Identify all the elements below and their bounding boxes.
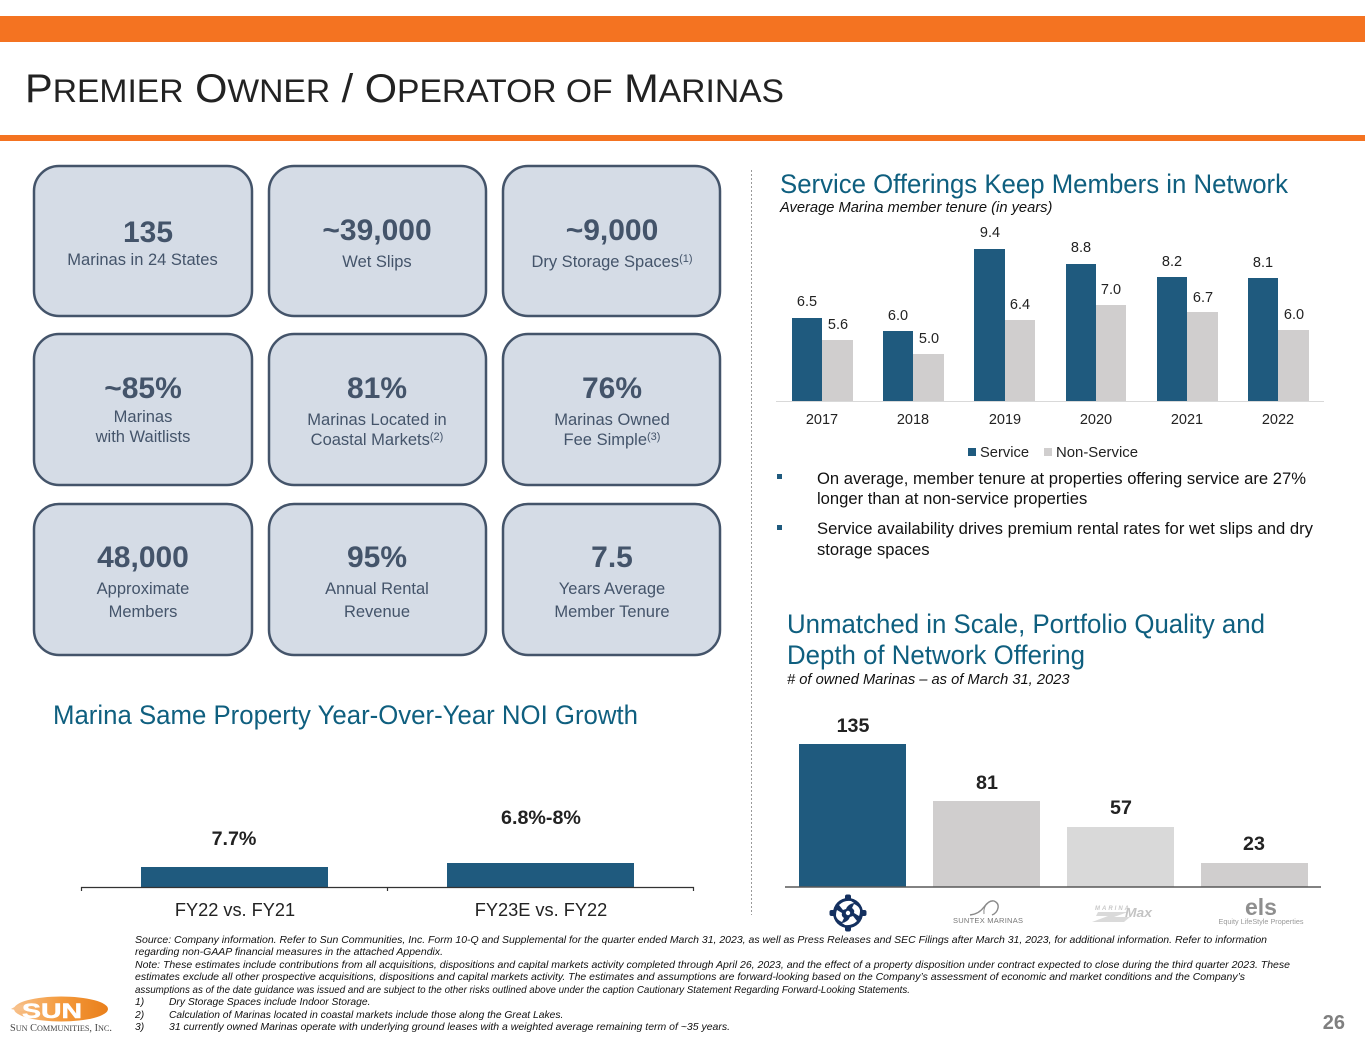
bar chart: member tenure: 8.1 bbox=[1253, 255, 1273, 271]
card: member tenure: 7.5 bbox=[591, 541, 633, 574]
logo: Equity LifeStyle Properties: Equity LifeStyle Properties bbox=[1218, 919, 1304, 926]
card: member tenure: Years Average bbox=[559, 580, 665, 598]
chart legend bbox=[968, 445, 1138, 461]
bar chart: member tenure: 8.2 bbox=[1162, 254, 1182, 270]
bar chart: member tenure: 2018 bbox=[897, 412, 929, 428]
title: PREMIER OWNER / OPERATOR OF MARINAS bbox=[25, 67, 784, 111]
bar chart: member tenure: 6.5 bbox=[797, 294, 817, 310]
icon: Sun marina wheel logo bbox=[830, 894, 866, 932]
bar chart: member tenure: 2022 bbox=[1262, 412, 1294, 428]
bar chart: NOI growth: FY22 vs. FY21 bbox=[175, 900, 295, 920]
card: waitlists: Marinas bbox=[114, 408, 172, 426]
bar chart: member tenure: 5.0 bbox=[919, 331, 939, 347]
bullet points: On average, member tenure at properties offering service are 27% bbox=[817, 469, 1306, 488]
logo: Suntex Marinas bbox=[953, 901, 1023, 925]
footnotes: regarding non-GAAP financial measures in the attached Appendix. bbox=[135, 947, 443, 958]
card: coastal markets: 81% bbox=[347, 372, 407, 405]
bar chart: member tenure: 7.0 bbox=[1101, 282, 1121, 298]
panel: key statistics cards bbox=[34, 166, 720, 655]
card: members bbox=[34, 504, 252, 655]
chart legend: Non-Service bbox=[1056, 445, 1138, 461]
card: coastal markets: (2) bbox=[430, 431, 443, 443]
card: dry storage: (1) bbox=[679, 253, 693, 265]
subheading: owned marinas: # of owned Marinas – as of March 31, 2023 bbox=[787, 672, 1070, 688]
footnotes: assumptions as of the date guidance was issued and are subject to the other risks outlined above under the caption Cautionary Statement Regarding Forward-Looking Statements. bbox=[135, 985, 910, 996]
bar chart: owned marinas bbox=[785, 715, 1321, 887]
card: dry storage: Dry Storage Spaces bbox=[531, 253, 679, 271]
card: coastal markets: Marinas Located in bbox=[307, 411, 447, 429]
bar chart: NOI growth bbox=[82, 807, 694, 920]
bar chart: owned marinas: 81 bbox=[976, 772, 998, 794]
logo: Sun Communities: SUN COMMUNITIES, INC. bbox=[10, 1023, 112, 1034]
bar chart: member tenure bbox=[776, 225, 1324, 461]
card: 135 marinas: Marinas in 24 States bbox=[67, 251, 218, 269]
card: wet slips bbox=[269, 166, 486, 316]
bullet points bbox=[777, 469, 1314, 559]
bar chart: NOI growth: FY23E vs. FY22 bbox=[475, 900, 607, 920]
bar chart: member tenure: 2017 bbox=[806, 412, 838, 428]
heading: unmatched in scale bbox=[787, 609, 1265, 670]
bar chart: member tenure: 2021 bbox=[1171, 412, 1203, 428]
card: rental revenue: Revenue bbox=[344, 603, 410, 621]
heading: service offerings: Service Offerings Keep Members in Network bbox=[780, 169, 1289, 199]
card: member tenure bbox=[503, 504, 720, 655]
card: wet slips: ~39,000 bbox=[322, 214, 432, 247]
footnotes: 2) bbox=[134, 1010, 144, 1021]
card: coastal markets bbox=[269, 334, 486, 485]
card: fee simple: 76% bbox=[582, 372, 642, 405]
bullet points: storage spaces bbox=[817, 540, 930, 559]
bar chart: member tenure: 6.0 bbox=[888, 308, 908, 324]
footnotes: estimates exclude all other prospective acquisitions, dispositions and capital markets activity. The estimates and assumptions are forward-looking based on the Company’s assessment of economic and market conditions and the Company’s bbox=[135, 972, 1245, 983]
footnotes: 3) bbox=[135, 1022, 144, 1033]
bar chart: member tenure: 5.6 bbox=[828, 317, 848, 333]
card: rental revenue bbox=[269, 504, 486, 655]
card: waitlists: with Waitlists bbox=[95, 428, 190, 446]
top orange band bbox=[0, 16, 1365, 42]
footnotes: Dry Storage Spaces include Indoor Storage. bbox=[169, 997, 370, 1008]
footnotes: 1) bbox=[135, 997, 144, 1008]
footnotes: Source: Company information. Refer to Sun Communities, Inc. Form 10-Q and Supplemental for the quarter ended March 31, 2023, as well as Press Releases and SEC Filings after March 31, 2023, for additional information. Refer to information bbox=[135, 935, 1267, 946]
card: 135 marinas bbox=[34, 166, 252, 316]
card: coastal markets: Coastal Markets bbox=[311, 431, 430, 449]
bar chart: owned marinas: 57 bbox=[1110, 797, 1132, 819]
card: dry storage: ~9,000 bbox=[566, 214, 658, 247]
logo: Equity LifeStyle Properties bbox=[1218, 894, 1304, 926]
card: members: Approximate bbox=[97, 580, 189, 598]
bar chart: owned marinas: 135 bbox=[837, 715, 869, 737]
heading: unmatched in scale: Unmatched in Scale, Portfolio Quality and bbox=[787, 609, 1265, 639]
logo: Sun Communities: SUN bbox=[22, 1000, 82, 1023]
card: rental revenue: Annual Rental bbox=[325, 580, 429, 598]
bar chart: owned marinas: 23 bbox=[1243, 833, 1265, 855]
footnotes: Note: These estimates include contributions from all acquisitions, dispositions and capital markets activity completed through April 26, 2023, and the effect of a property disposition under contract expected to close during the third quarter 2023. These bbox=[135, 960, 1290, 971]
footnotes: Calculation of Marinas located in coastal markets include those along the Great Lakes. bbox=[169, 1010, 563, 1021]
logo: Suntex Marinas: SUNTEX MARINAS bbox=[953, 916, 1023, 925]
footnotes: 31 currently owned Marinas operate with underlying ground leases with a weighted average remaining term of ~35 years. bbox=[169, 1022, 730, 1033]
card: members: Members bbox=[109, 603, 177, 621]
logo: MarinaMax: Max bbox=[1125, 905, 1153, 920]
bar chart: member tenure: 8.8 bbox=[1071, 240, 1091, 256]
subheading: tenure: Average Marina member tenure (in years) bbox=[779, 200, 1052, 216]
bar chart: NOI growth: 7.7% bbox=[212, 828, 256, 850]
footnotes bbox=[134, 935, 1290, 1033]
page number: 26 bbox=[1323, 1012, 1345, 1034]
title underline bbox=[0, 135, 1365, 141]
bar chart: member tenure: 6.4 bbox=[1010, 297, 1030, 313]
card: rental revenue: 95% bbox=[347, 541, 407, 574]
heading: unmatched in scale: Depth of Network Offering bbox=[787, 640, 1085, 670]
bar chart: member tenure: 2019 bbox=[989, 412, 1021, 428]
bar chart: member tenure: 6.0 bbox=[1284, 307, 1304, 323]
chart legend: Service bbox=[980, 445, 1029, 461]
bar chart: member tenure: 6.7 bbox=[1193, 290, 1213, 306]
card: fee simple: Fee Simple bbox=[564, 431, 647, 449]
bullet points: longer than at non-service properties bbox=[817, 489, 1087, 508]
logo: MarinaMax bbox=[1092, 905, 1153, 922]
card: 135 marinas: 135 bbox=[123, 216, 173, 249]
bar chart: member tenure: 2020 bbox=[1080, 412, 1112, 428]
heading: NOI growth: Marina Same Property Year-Over-Year NOI Growth bbox=[53, 700, 638, 730]
logo: Equity LifeStyle Properties: els bbox=[1245, 894, 1277, 920]
card: waitlists: ~85% bbox=[104, 372, 182, 405]
logo: Sun Communities bbox=[10, 996, 112, 1034]
card: fee simple bbox=[503, 334, 720, 485]
bar chart: NOI growth: 6.8%-8% bbox=[501, 807, 581, 829]
card: fee simple: (3) bbox=[647, 431, 660, 443]
card: waitlists bbox=[34, 334, 252, 485]
card: dry storage bbox=[503, 166, 720, 316]
bullet points: Service availability drives premium rental rates for wet slips and dry bbox=[817, 519, 1314, 538]
card: fee simple: Marinas Owned bbox=[554, 411, 670, 429]
logo: MarinaMax: MARINA bbox=[1095, 906, 1129, 912]
bar chart: member tenure: 9.4 bbox=[980, 225, 1000, 241]
card: members: 48,000 bbox=[97, 541, 189, 574]
card: wet slips: Wet Slips bbox=[342, 253, 412, 271]
card: member tenure: Member Tenure bbox=[554, 603, 670, 621]
